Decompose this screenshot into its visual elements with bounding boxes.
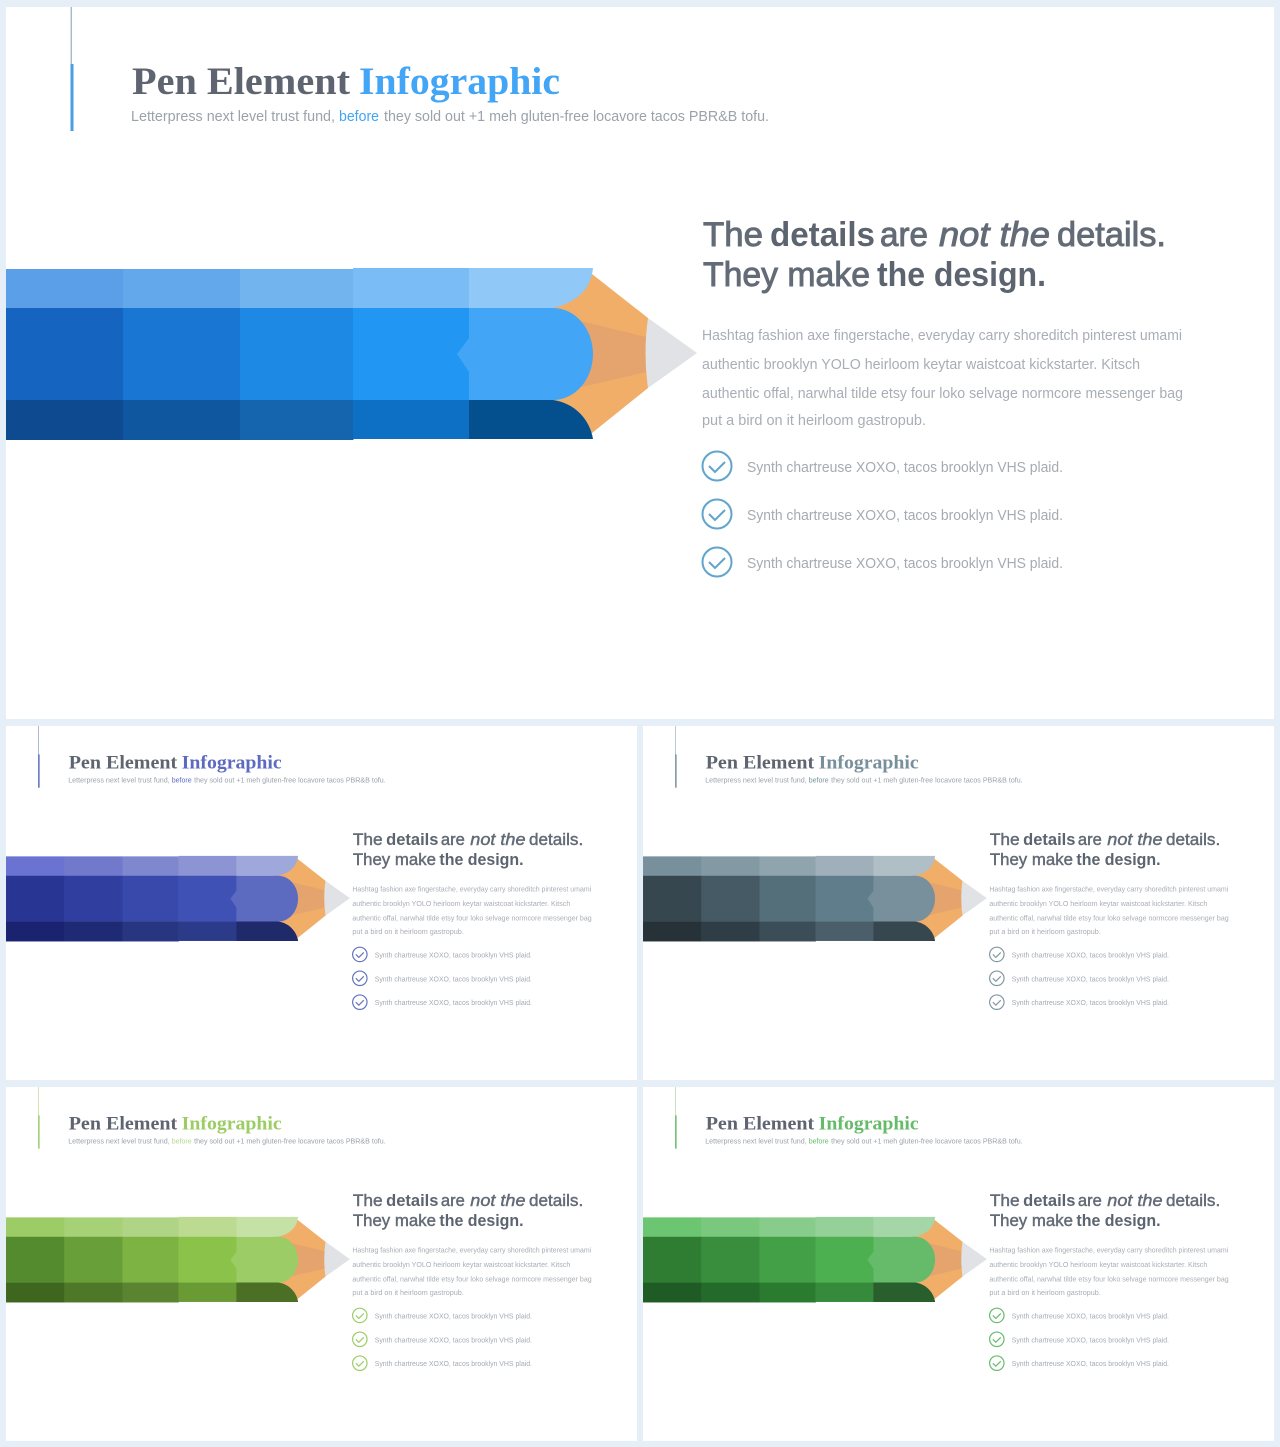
checklist bbox=[990, 947, 1169, 1009]
panel: light green slide bbox=[6, 1087, 637, 1441]
check item 2: Synth chartreuse XOXO, tacos brooklyn VHS plaid. bbox=[1012, 974, 1169, 983]
check item 2 bbox=[990, 1332, 1169, 1347]
subtitle: Letterpress next level trust fund, bbox=[68, 776, 170, 785]
body text: authentic offal, narwhal tilde etsy four loko selvage normcore messenger bag bbox=[989, 1275, 1229, 1284]
heading: details. bbox=[529, 830, 583, 849]
heading: the design. bbox=[877, 256, 1046, 294]
heading: details bbox=[386, 830, 438, 849]
checklist bbox=[702, 452, 1063, 576]
heading: are bbox=[441, 830, 465, 849]
title: Infographic bbox=[182, 752, 282, 773]
body text: Hashtag fashion axe fingerstache, everyday carry shoreditch pinterest umami bbox=[989, 885, 1229, 894]
check item 3: Synth chartreuse XOXO, tacos brooklyn VHS plaid. bbox=[1012, 1359, 1169, 1368]
subtitle: before bbox=[339, 109, 379, 125]
heading: are bbox=[441, 1191, 465, 1210]
body text: authentic brooklyn YOLO heirloom keytar waistcoat kickstarter. Kitsch bbox=[352, 899, 570, 908]
body text: authentic offal, narwhal tilde etsy four loko selvage normcore messenger bag bbox=[989, 914, 1229, 923]
check item 2: Synth chartreuse XOXO, tacos brooklyn VHS plaid. bbox=[747, 508, 1063, 524]
body text: Hashtag fashion axe fingerstache, everyday carry shoreditch pinterest umami bbox=[352, 1246, 592, 1255]
check item 1: Synth chartreuse XOXO, tacos brooklyn VHS plaid. bbox=[375, 1311, 532, 1320]
heading bbox=[353, 830, 583, 869]
title bbox=[69, 1113, 282, 1134]
body text bbox=[352, 885, 592, 936]
title bbox=[132, 60, 560, 103]
check item 3 bbox=[353, 995, 532, 1009]
check item 3: Synth chartreuse XOXO, tacos brooklyn VHS plaid. bbox=[1012, 998, 1169, 1007]
subtitle: they sold out +1 meh gluten-free locavore tacos PBR&B tofu. bbox=[194, 1137, 386, 1146]
heading: They make bbox=[703, 256, 870, 294]
title accent line bbox=[38, 726, 40, 788]
heading: the design. bbox=[1076, 850, 1161, 869]
panel: green slide bbox=[643, 1087, 1274, 1441]
check item 1 bbox=[702, 452, 1063, 480]
title: Pen Element bbox=[132, 60, 350, 103]
check item 2 bbox=[702, 500, 1063, 528]
check item 2 bbox=[990, 971, 1169, 986]
heading: details. bbox=[1057, 216, 1166, 254]
body text bbox=[989, 1246, 1229, 1297]
body text: authentic offal, narwhal tilde etsy four loko selvage normcore messenger bag bbox=[702, 386, 1183, 402]
title: Pen Element bbox=[706, 752, 815, 773]
check item 1 bbox=[353, 947, 532, 962]
check item 1 bbox=[353, 1308, 532, 1323]
title bbox=[69, 752, 282, 773]
heading: details. bbox=[529, 1191, 583, 1210]
body text: Hashtag fashion axe fingerstache, everyday carry shoreditch pinterest umami bbox=[989, 1246, 1229, 1255]
check item 1: Synth chartreuse XOXO, tacos brooklyn VHS plaid. bbox=[1012, 1311, 1169, 1320]
heading bbox=[353, 1191, 583, 1230]
subtitle bbox=[705, 1137, 1023, 1146]
title bbox=[706, 1113, 919, 1134]
heading: They make bbox=[990, 850, 1073, 869]
checklist bbox=[353, 1308, 532, 1370]
heading: are bbox=[1078, 830, 1102, 849]
checklist bbox=[353, 947, 532, 1009]
body text bbox=[989, 885, 1229, 936]
check item 2: Synth chartreuse XOXO, tacos brooklyn VHS plaid. bbox=[375, 1335, 532, 1344]
subtitle bbox=[705, 776, 1023, 785]
check item 1 bbox=[990, 947, 1169, 962]
check item 3: Synth chartreuse XOXO, tacos brooklyn VHS plaid. bbox=[747, 556, 1063, 572]
heading bbox=[990, 830, 1220, 869]
body text: authentic brooklyn YOLO heirloom keytar waistcoat kickstarter. Kitsch bbox=[702, 357, 1140, 373]
body text bbox=[702, 328, 1183, 429]
body text bbox=[352, 1246, 592, 1297]
heading: not the bbox=[1107, 1191, 1163, 1210]
subtitle: Letterpress next level trust fund, bbox=[705, 1137, 807, 1146]
heading: The bbox=[990, 830, 1020, 849]
body text: Hashtag fashion axe fingerstache, everyday carry shoreditch pinterest umami bbox=[352, 885, 592, 894]
check item 2 bbox=[353, 971, 532, 986]
body text: put a bird on it heirloom gastropub. bbox=[989, 927, 1101, 936]
subtitle: they sold out +1 meh gluten-free locavore tacos PBR&B tofu. bbox=[831, 776, 1023, 785]
subtitle: before bbox=[172, 776, 192, 785]
heading: are bbox=[880, 216, 928, 254]
subtitle: Letterpress next level trust fund, bbox=[705, 776, 807, 785]
check item 2 bbox=[353, 1332, 532, 1347]
heading: the design. bbox=[439, 1211, 524, 1230]
pencil illustration bbox=[643, 1217, 987, 1302]
panel: indigo slide bbox=[6, 726, 637, 1080]
heading: The bbox=[703, 216, 763, 254]
title accent line bbox=[70, 7, 74, 131]
subtitle: before bbox=[172, 1137, 192, 1146]
heading: not the bbox=[939, 216, 1050, 254]
heading: the design. bbox=[1076, 1211, 1161, 1230]
heading: not the bbox=[470, 830, 526, 849]
check item 2: Synth chartreuse XOXO, tacos brooklyn VHS plaid. bbox=[1012, 1335, 1169, 1344]
subtitle: they sold out +1 meh gluten-free locavore tacos PBR&B tofu. bbox=[194, 776, 386, 785]
panel: blue main slide bbox=[6, 7, 1274, 719]
check item 3 bbox=[990, 995, 1169, 1009]
subtitle: Letterpress next level trust fund, bbox=[131, 109, 335, 125]
title: Infographic bbox=[359, 60, 560, 103]
check item 3: Synth chartreuse XOXO, tacos brooklyn VHS plaid. bbox=[375, 998, 532, 1007]
title: Pen Element bbox=[69, 752, 178, 773]
title accent line bbox=[675, 726, 677, 788]
pencil illustration bbox=[6, 1217, 350, 1302]
subtitle: they sold out +1 meh gluten-free locavore tacos PBR&B tofu. bbox=[831, 1137, 1023, 1146]
checklist bbox=[990, 1308, 1169, 1370]
subtitle bbox=[68, 776, 386, 785]
heading: The bbox=[353, 830, 383, 849]
check item 1: Synth chartreuse XOXO, tacos brooklyn VHS plaid. bbox=[1012, 950, 1169, 959]
heading: details bbox=[386, 1191, 438, 1210]
heading: not the bbox=[470, 1191, 526, 1210]
body text: authentic brooklyn YOLO heirloom keytar waistcoat kickstarter. Kitsch bbox=[352, 1260, 570, 1269]
body text: authentic offal, narwhal tilde etsy four loko selvage normcore messenger bag bbox=[352, 1275, 592, 1284]
heading: not the bbox=[1107, 830, 1163, 849]
pencil illustration bbox=[6, 856, 350, 941]
heading: The bbox=[990, 1191, 1020, 1210]
heading: They make bbox=[353, 850, 436, 869]
heading: details bbox=[1023, 830, 1075, 849]
title: Infographic bbox=[182, 1113, 282, 1134]
title: Infographic bbox=[819, 1113, 919, 1134]
title accent line bbox=[675, 1087, 677, 1149]
body text: authentic offal, narwhal tilde etsy four loko selvage normcore messenger bag bbox=[352, 914, 592, 923]
heading bbox=[990, 1191, 1220, 1230]
check item 2: Synth chartreuse XOXO, tacos brooklyn VHS plaid. bbox=[375, 974, 532, 983]
panel: slate grey slide bbox=[643, 726, 1274, 1080]
heading: details bbox=[770, 216, 875, 254]
title: Infographic bbox=[819, 752, 919, 773]
pencil illustration bbox=[6, 268, 697, 440]
heading: The bbox=[353, 1191, 383, 1210]
body text: Hashtag fashion axe fingerstache, everyday carry shoreditch pinterest umami bbox=[702, 328, 1182, 344]
subtitle: before bbox=[809, 1137, 829, 1146]
check item 1: Synth chartreuse XOXO, tacos brooklyn VHS plaid. bbox=[375, 950, 532, 959]
body text: authentic brooklyn YOLO heirloom keytar waistcoat kickstarter. Kitsch bbox=[989, 899, 1207, 908]
subtitle bbox=[68, 1137, 386, 1146]
heading: details. bbox=[1166, 1191, 1220, 1210]
title accent line bbox=[38, 1087, 40, 1149]
title: Pen Element bbox=[706, 1113, 815, 1134]
subtitle bbox=[131, 109, 769, 125]
body text: authentic brooklyn YOLO heirloom keytar waistcoat kickstarter. Kitsch bbox=[989, 1260, 1207, 1269]
subtitle: Letterpress next level trust fund, bbox=[68, 1137, 170, 1146]
check item 3: Synth chartreuse XOXO, tacos brooklyn VHS plaid. bbox=[375, 1359, 532, 1368]
title bbox=[706, 752, 919, 773]
subtitle: before bbox=[809, 776, 829, 785]
check item 1 bbox=[990, 1308, 1169, 1323]
body text: put a bird on it heirloom gastropub. bbox=[352, 927, 464, 936]
heading: the design. bbox=[439, 850, 524, 869]
check item 1: Synth chartreuse XOXO, tacos brooklyn VHS plaid. bbox=[747, 460, 1063, 476]
body text: put a bird on it heirloom gastropub. bbox=[702, 413, 926, 429]
body text: put a bird on it heirloom gastropub. bbox=[989, 1288, 1101, 1297]
heading: They make bbox=[990, 1211, 1073, 1230]
subtitle: they sold out +1 meh gluten-free locavore tacos PBR&B tofu. bbox=[384, 109, 769, 125]
check item 3 bbox=[353, 1356, 532, 1370]
heading: details. bbox=[1166, 830, 1220, 849]
check item 3 bbox=[702, 548, 1063, 576]
title: Pen Element bbox=[69, 1113, 178, 1134]
check item 3 bbox=[990, 1356, 1169, 1370]
heading: They make bbox=[353, 1211, 436, 1230]
heading bbox=[703, 216, 1166, 294]
heading: are bbox=[1078, 1191, 1102, 1210]
heading: details bbox=[1023, 1191, 1075, 1210]
pencil illustration bbox=[643, 856, 987, 941]
body text: put a bird on it heirloom gastropub. bbox=[352, 1288, 464, 1297]
